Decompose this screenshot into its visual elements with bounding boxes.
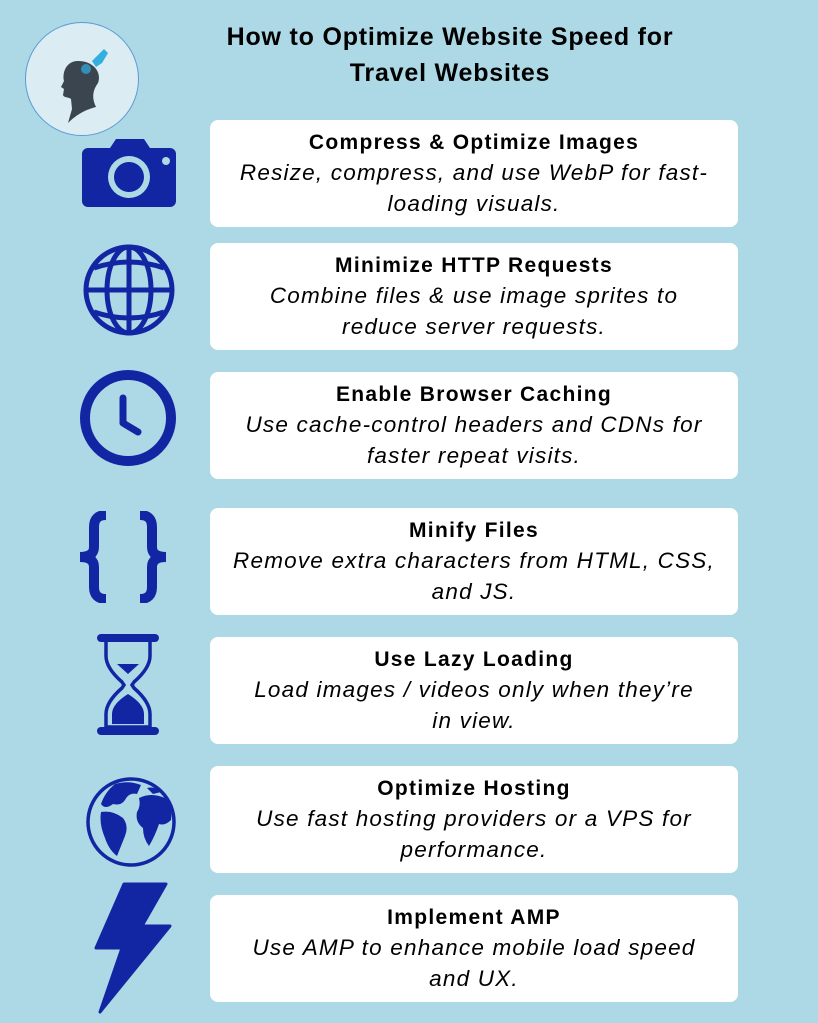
card 5 <box>210 637 738 744</box>
icon: braces <box>80 511 166 603</box>
card 2 <box>210 243 738 350</box>
icon: hourglass <box>97 634 159 735</box>
card 1: Compress & Optimize Images <box>309 131 639 154</box>
card 5: Use Lazy Loading <box>374 648 574 671</box>
icon: earth <box>86 777 176 867</box>
card 6: performance. <box>401 837 547 862</box>
icon: globe grid <box>84 244 174 336</box>
card 4: Minify Files <box>409 519 539 542</box>
icon: clock <box>80 370 176 466</box>
card 3: Use cache-control headers and CDNs for <box>245 412 703 437</box>
card 2: Combine files & use image sprites to <box>270 283 678 308</box>
logo <box>25 22 139 136</box>
icon: camera <box>82 139 176 207</box>
card 6 <box>210 766 738 873</box>
card 1: loading visuals. <box>387 191 561 216</box>
card 1: Resize, compress, and use WebP for fast- <box>240 160 708 185</box>
card 5: in view. <box>432 708 516 733</box>
icon: lightning <box>94 882 172 1014</box>
card 2: Minimize HTTP Requests <box>335 254 613 277</box>
card 2: reduce server requests. <box>342 314 606 339</box>
card 7 <box>210 895 738 1002</box>
card 7: and UX. <box>429 966 519 991</box>
card 5: Load images / videos only when they’re <box>254 677 694 702</box>
card 4: and JS. <box>432 579 516 604</box>
card 6: Optimize Hosting <box>377 777 571 800</box>
card 3: Enable Browser Caching <box>336 383 612 406</box>
card 7: Use AMP to enhance mobile load speed <box>252 935 696 960</box>
card 3: faster repeat visits. <box>367 443 581 468</box>
card 6: Use fast hosting providers or a VPS for <box>256 806 692 831</box>
title: Travel Websites <box>350 59 550 87</box>
title <box>227 23 673 87</box>
title: How to Optimize Website Speed for <box>227 23 673 51</box>
card 4: Remove extra characters from HTML, CSS, <box>233 548 715 573</box>
card 7: Implement AMP <box>387 906 561 929</box>
card 1 <box>210 120 738 227</box>
card 3 <box>210 372 738 479</box>
card 4 <box>210 508 738 615</box>
